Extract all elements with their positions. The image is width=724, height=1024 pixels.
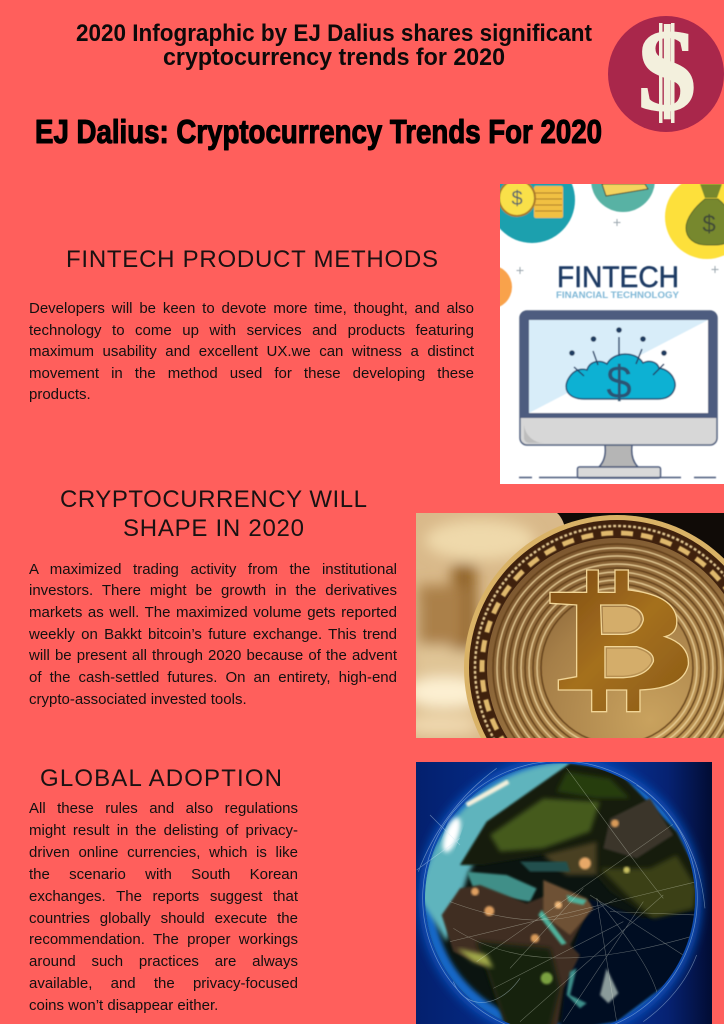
icon: cloud with dollar (566, 327, 675, 408)
fintech logo text: FINANCIAL TECHNOLOGY (556, 290, 679, 300)
outer network arcs (417, 761, 705, 1024)
text block: cryptocurrency (29, 560, 397, 708)
icon: dollar badge (608, 14, 724, 134)
text block: cryptocurrency: A maximized trading activity from the institutional (29, 560, 397, 578)
text block: cryptocurrency: crypto-associated invested tools. (29, 691, 247, 708)
text block: fintech: products. (29, 386, 91, 403)
bitcoin coin (464, 515, 724, 738)
city lights (471, 888, 479, 896)
heading: fintech product methods: FINTECH PRODUCT METHODS (66, 246, 438, 273)
text block: fintech: technology to come up with services and products featuring (29, 322, 474, 339)
icon: money bag (665, 175, 724, 259)
text block: global adoption: exchanges. The reports suggest that (29, 888, 298, 905)
glare on the limb (439, 815, 464, 854)
icon: money bag: $ (702, 211, 716, 238)
text block: cryptocurrency: will be present all through 2020 because of the advent (29, 647, 397, 664)
icon: orange circle (468, 265, 512, 309)
heading: global adoption: GLOBAL ADOPTION (40, 765, 282, 792)
image: fintech illustration (500, 184, 724, 484)
heading: cryptocurrency will shape in 2020 (60, 486, 367, 542)
network lines (450, 768, 697, 1022)
text block: global adoption: the scenario with South Korean (29, 866, 298, 883)
text block: cryptocurrency: investors. There might be growth in the derivatives (29, 582, 397, 599)
text block: fintech: Developers will be keen to devote more time, thought, and also (29, 300, 474, 317)
fintech logo text: FINTECH (557, 261, 679, 294)
text block: cryptocurrency: markets as well. The maximized volume gets reported (29, 604, 397, 621)
text block: global adoption: might result in the delisting of privacy- (29, 822, 298, 839)
text block: global adoption: available, and the privacy-focused (29, 975, 298, 992)
arabia (543, 880, 593, 935)
text block: global adoption: around such practices are always (29, 953, 298, 970)
text block: fintech: maximum usability and excellent UX.we can witness a distinct (29, 343, 474, 360)
atmosphere and shallow water (420, 762, 573, 942)
text block: cryptocurrency: weekly on Bakkt bitcoin’s future exchange. This trend (29, 626, 397, 643)
icon: teal circle (591, 148, 655, 212)
text block: global adoption: recommendation. The proper workings (29, 931, 298, 948)
heading: cryptocurrency will shape in 2020: SHAPE IN 2020 (123, 515, 304, 542)
ocean (560, 898, 703, 1024)
text block: fintech: movement in the method used for these developing these (29, 365, 474, 382)
image: bitcoin coin (416, 513, 724, 738)
decorative plus signs (516, 219, 718, 274)
blurred background coin (400, 513, 568, 738)
text block: global adoption: All these rules and also regulations (29, 800, 298, 817)
icon: monitor (519, 311, 717, 478)
limb glow (428, 767, 692, 1024)
icon: cloud with dollar: $ (606, 356, 632, 408)
africa (442, 885, 590, 1024)
image: globe with network (416, 762, 712, 1024)
icon: coin stack circle (489, 157, 575, 243)
globe (417, 757, 705, 1024)
text block: global adoption: countries globally should execute the (29, 910, 298, 926)
text block: global adoption: coins won’t disappear either. (29, 997, 218, 1014)
text block: global adoption: driven online currencies, which is like (29, 844, 298, 861)
icon: coin stack circle: $ (511, 188, 523, 210)
top heading (76, 20, 592, 71)
heading: cryptocurrency will shape in 2020: CRYPTOCURRENCY WILL (60, 486, 367, 513)
text block: global adoption (29, 800, 298, 1014)
top heading: cryptocurrency trends for 2020 (163, 44, 505, 71)
eurasia landmass (460, 763, 700, 918)
madagascar (600, 968, 618, 1003)
text block: cryptocurrency: of the cash-settled futures. On an entirety, high-end (29, 669, 397, 686)
text block: fintech (29, 300, 474, 403)
mediterranean (467, 872, 537, 902)
